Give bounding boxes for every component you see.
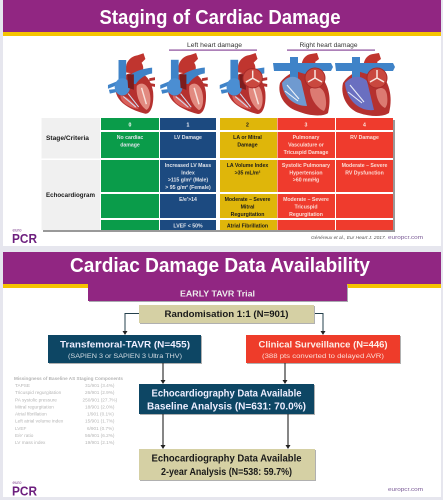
header band (3, 0, 441, 32)
column: stage 1: 1 (187, 122, 190, 128)
box: randomisation (139, 305, 315, 324)
column: stage 1: E/e'>14 (179, 197, 197, 203)
table: staging criteria (41, 118, 395, 232)
box: baseline analysis: Baseline Analysis (N=631: 70.0%) (147, 402, 306, 412)
column: stage 3: Hypertension (289, 170, 323, 176)
column: stage 3: Vasculature or (288, 142, 324, 148)
column: stage 3: Tricuspid (294, 204, 318, 210)
box: clinical surveillance: Clinical Surveillance (N=446) (258, 340, 388, 350)
icon: heart stage 2 (220, 53, 267, 114)
table: missingness of baseline components: 250/901 (27.7%) (82, 398, 118, 402)
box: transfemoral TAVR: Transfemoral-TAVR (N=455) (60, 340, 190, 350)
column: stage 3: Pulmonary (293, 135, 320, 141)
box: 2-year analysis (139, 449, 316, 481)
icon: heart stage 0 (108, 53, 155, 114)
column: stage 0 (101, 118, 159, 230)
label: right heart damage (287, 42, 375, 51)
box: transfemoral TAVR (48, 335, 202, 364)
box: transfemoral TAVR: (SAPIEN 3 or SAPIEN 3 Ultra THV) (68, 353, 182, 360)
column: stage 4 (336, 118, 393, 230)
table: missingness of baseline components: 18/901 (2.0%) (85, 404, 115, 410)
table: missingness of baseline components: 15/901 (1.7%) (85, 418, 115, 424)
column: stage 3 (278, 118, 335, 230)
title: Cardiac Damage Data Availability (70, 255, 371, 277)
column: stage 1: LVEF < 50% (173, 224, 203, 230)
label: left heart damage (169, 42, 257, 51)
column: stage 2: Atrial Fibrillation (227, 224, 268, 230)
box: baseline analysis (139, 384, 315, 415)
column: stage 1: > 95 g/m² (Female) (165, 185, 211, 191)
table: missingness of baseline components: E/e' ratio (15, 433, 34, 438)
column: stage 4: Moderate – Severe (342, 163, 388, 169)
column: stage 2: 2 (246, 122, 249, 128)
table: missingness of baseline components: Tricuspid regurgitation (15, 390, 62, 395)
column: stage 0: 0 (129, 122, 132, 128)
column: stage 0: No cardiac (117, 135, 143, 141)
column: stage 2: Regurgitation (231, 212, 264, 218)
column: stage 2: LA Volume Index (227, 163, 268, 169)
table: missingness of baseline components (14, 376, 123, 445)
footer url: europcr.com (388, 487, 424, 493)
table: missingness of baseline components: Atrial fibrillation (15, 412, 47, 416)
box: 2-year analysis: Echocardiography Data Available (152, 454, 302, 464)
icon: heart stage 4 (335, 53, 395, 116)
row labels column: Stage/Criteria (46, 135, 89, 142)
arrow: randomisation to surveillance (314, 314, 323, 334)
arrow: surveillance to baseline (284, 363, 286, 383)
table: missingness of baseline components: 6/901 (0.7%) (87, 426, 114, 431)
column: stage 2: Mitral (241, 204, 255, 210)
box: 2-year analysis: 2-year Analysis (N=538: 59.7%) (161, 467, 292, 478)
arrow: baseline to 2-year left (162, 414, 164, 448)
column: stage 3: Tricuspid Damage (284, 150, 328, 156)
column: stage 3: Moderate – Severe (283, 197, 329, 203)
title: Staging of Cardiac Damage (100, 7, 340, 29)
row labels column (42, 118, 100, 230)
logo: EuroPCR: euro (12, 480, 22, 485)
box: clinical surveillance (246, 335, 401, 364)
column: stage 4: RV Dysfunction (345, 170, 384, 176)
column: stage 2: Damage (237, 142, 258, 148)
column: stage 1: >115 g/m² (Male) (168, 178, 208, 184)
column: stage 2 (220, 118, 277, 230)
table: missingness of baseline components: Mitral regurgitation (15, 404, 54, 410)
table: missingness of baseline components: LV mass index (15, 440, 46, 445)
table: missingness of baseline components: 56/901 (6.2%) (85, 433, 115, 438)
panel: staging of cardiac damage (3, 0, 441, 246)
icon: heart stage 1 (160, 53, 208, 114)
column: stage 2: Moderate – Severe (225, 197, 271, 203)
row labels column: Echocardiogram (46, 192, 95, 199)
table: missingness of baseline components: 31/901 (3.4%) (85, 383, 115, 388)
trial banner (88, 284, 348, 302)
table: missingness of baseline components: Missingness of Baseline AS Staging Components (14, 376, 123, 381)
column: stage 2: LA or Mitral (233, 135, 262, 141)
column: stage 4: 4 (363, 122, 366, 128)
icon: heart stage 3 (273, 53, 333, 115)
column: stage 1 (160, 118, 216, 230)
column: stage 3: Regurgitation (289, 212, 323, 218)
label: right heart damage: Right heart damage (300, 42, 358, 49)
header band (3, 252, 441, 284)
column: stage 1: Increased LV Mass (165, 163, 211, 169)
citation: Généreux et al., Eur Heart J. 2017. (311, 235, 386, 241)
column: stage 3: 3 (305, 122, 308, 128)
column: stage 0: damage (120, 142, 140, 148)
column: stage 1: LV Damage (174, 135, 202, 141)
box: baseline analysis: Echocardiography Data Available (152, 388, 302, 400)
footer url: europcr.com (388, 235, 424, 241)
table: missingness of baseline components: 19/901 (2.1%) (85, 440, 115, 445)
label: left heart damage: Left heart damage (187, 42, 242, 49)
column: stage 3: Systolic Pulmonary (282, 163, 330, 169)
logo: EuroPCR: PCR (12, 231, 38, 246)
panel: cardiac damage data availability (3, 252, 441, 498)
column: stage 3: >60 mmHg (293, 178, 319, 184)
table: missingness of baseline components: 26/901 (2.9%) (85, 390, 115, 395)
table: missingness of baseline components: LVEF (15, 426, 27, 431)
table: missingness of baseline components: PA systolic pressure (15, 398, 57, 402)
arrow: baseline to 2-year right (287, 414, 289, 448)
box: randomisation: Randomisation 1:1 (N=901) (164, 308, 288, 319)
arrow: TAVR to baseline (162, 363, 164, 383)
logo: EuroPCR: euro (12, 228, 22, 232)
column: stage 2: >35 mL/m² (235, 170, 261, 176)
column: stage 1: Index (181, 170, 195, 176)
logo: EuroPCR: PCR (12, 484, 38, 498)
trial banner: EARLY TAVR Trial (180, 288, 255, 298)
box: clinical surveillance: (388 pts converted to delayed AVR) (262, 353, 384, 360)
table: missingness of baseline components: TAPSE (15, 383, 30, 388)
arrow: randomisation to TAVR (125, 314, 139, 334)
column: stage 4: RV Damage (350, 135, 379, 141)
table: missingness of baseline components: 1/901 (0.1%) (87, 412, 114, 416)
table: missingness of baseline components: Left atrial volume index (15, 418, 64, 424)
